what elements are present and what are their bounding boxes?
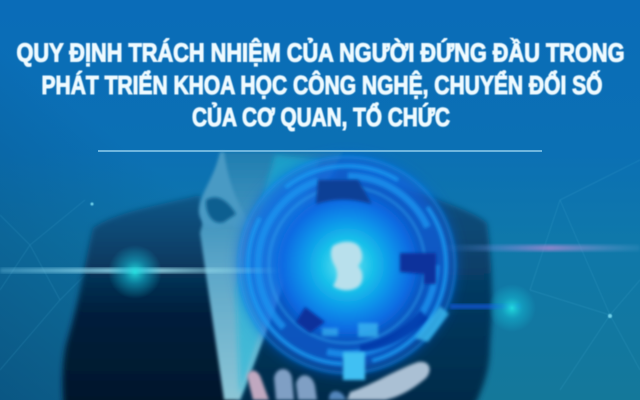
suit left side (63, 195, 240, 400)
collar (199, 152, 256, 232)
inner core (271, 189, 423, 341)
digital disc (236, 155, 455, 395)
collar shadow (206, 197, 236, 223)
light wedge (236, 155, 320, 395)
shirt (200, 152, 343, 400)
outer disc (239, 157, 455, 373)
divider (98, 150, 542, 152)
left glow (108, 245, 162, 299)
suit right side (236, 165, 492, 400)
network lines (0, 160, 640, 390)
bright segments (322, 306, 449, 380)
fingers (247, 370, 269, 400)
dark segments (296, 180, 436, 352)
right glow (488, 284, 536, 332)
bitcoin symbol (331, 242, 362, 290)
light beams and glows (0, 245, 640, 332)
hand (247, 362, 430, 400)
left beam (0, 268, 280, 273)
palm and thumb (347, 362, 430, 400)
right beam (440, 245, 640, 251)
title line 3: CỦA CƠ QUAN, TỔ CHỨC (192, 101, 450, 132)
title (16, 36, 624, 132)
figure: businessman (63, 152, 492, 400)
lower right beam (450, 304, 520, 309)
rings (239, 157, 455, 373)
